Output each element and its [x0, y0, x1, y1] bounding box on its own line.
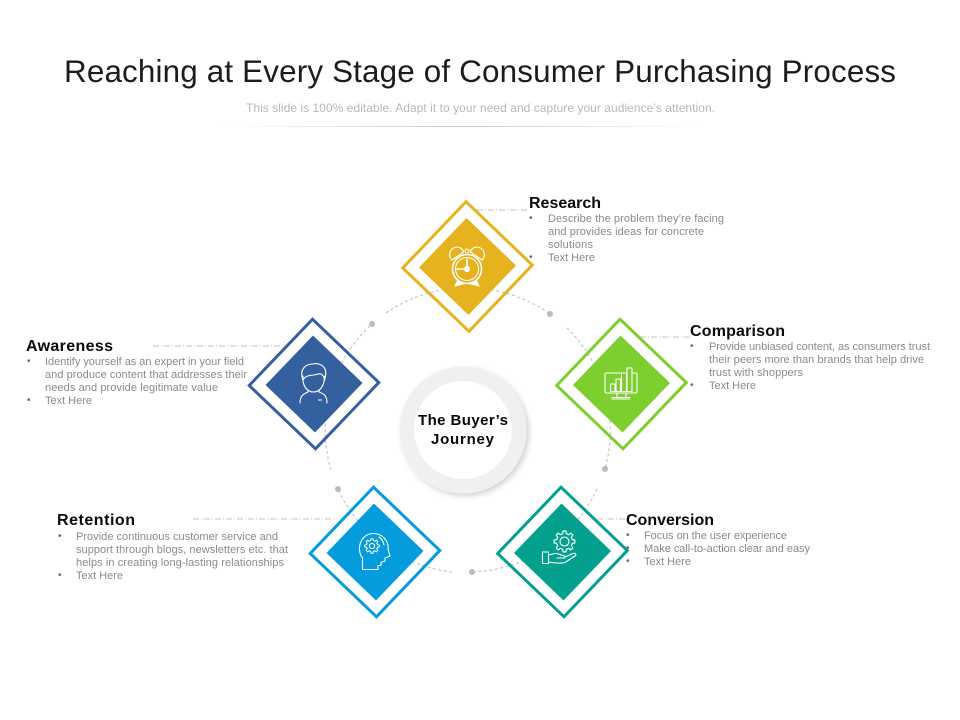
text block: research: Describe the problem they’re facing [548, 213, 724, 225]
text block: research: Text Here [548, 252, 595, 264]
text block: awareness: • [27, 356, 31, 367]
text block: research [529, 213, 724, 264]
panel: retention diamond [310, 487, 440, 617]
text block: retention: support through blogs, newsletters etc. that [76, 544, 288, 556]
text block: retention: Text Here [76, 570, 123, 582]
heading: comparison: Comparison [690, 323, 785, 340]
text block: awareness: needs and provide legitimate value [45, 382, 218, 394]
text block: comparison: • [690, 341, 694, 352]
text block: conversion: Focus on the user experience [644, 530, 787, 542]
text block: retention [58, 531, 288, 582]
title: Reaching at Every Stage of Consumer Purchasing Process [64, 54, 896, 89]
heading: conversion: Conversion [626, 512, 714, 529]
text block: retention: • [58, 570, 62, 581]
text block: awareness: Identify yourself as an expert in your field [45, 356, 244, 368]
text block: retention: helps in creating long-lasting relationships [76, 557, 284, 569]
text block: comparison: their peers more than brands that help drive [709, 354, 924, 366]
heading: retention: Retention [57, 512, 135, 529]
icon: monitor with bars [605, 368, 637, 399]
text block: awareness: • [27, 395, 31, 406]
text block: awareness: and produce content that addresses their [45, 369, 247, 381]
center circle: The Buyer's Journey: Journey [431, 431, 495, 448]
text block: conversion: • [626, 530, 630, 541]
text block: research: • [529, 252, 533, 263]
text block: retention: • [58, 531, 62, 542]
icon: head with gear [359, 534, 390, 570]
text block: research: • [529, 213, 533, 224]
text block: conversion: Make call-to-action clear and easy [644, 543, 810, 555]
text block: research: solutions [548, 239, 594, 251]
text block: awareness: Text Here [45, 395, 92, 407]
text block: conversion: • [626, 543, 630, 554]
text block: conversion: • [626, 556, 630, 567]
subtitle: This slide is 100% editable. Adapt it to your need and capture your audience’s attention. [246, 101, 715, 115]
connector lines [153, 210, 690, 519]
dashed journey ring [325, 288, 610, 575]
icon: alarm clock [450, 247, 484, 286]
text block: comparison: Text Here [709, 380, 756, 392]
panel: awareness diamond [249, 319, 379, 449]
panel: conversion diamond [498, 487, 627, 617]
text block: comparison: Provide unbiased content, as consumers trust [709, 341, 930, 353]
text block: comparison [690, 341, 930, 392]
icon: person [300, 364, 327, 403]
center circle: The Buyer's Journey [400, 366, 526, 494]
text block: conversion: Text Here [644, 556, 691, 568]
heading: research: Research [529, 195, 601, 212]
heading: awareness: Awareness [26, 338, 113, 355]
text block: conversion [626, 530, 810, 568]
text block: research: and provides ideas for concrete [548, 226, 704, 238]
text block: comparison: • [690, 380, 694, 391]
panel: comparison diamond [557, 319, 686, 449]
panel: research diamond [403, 202, 532, 331]
text block: awareness [27, 356, 247, 407]
text block: comparison: trust with shoppers [709, 367, 804, 379]
center circle: The Buyer's Journey: The Buyer’s [418, 412, 508, 429]
icon: gear over open hand [542, 531, 576, 564]
text block: retention: Provide continuous customer service and [76, 531, 278, 543]
